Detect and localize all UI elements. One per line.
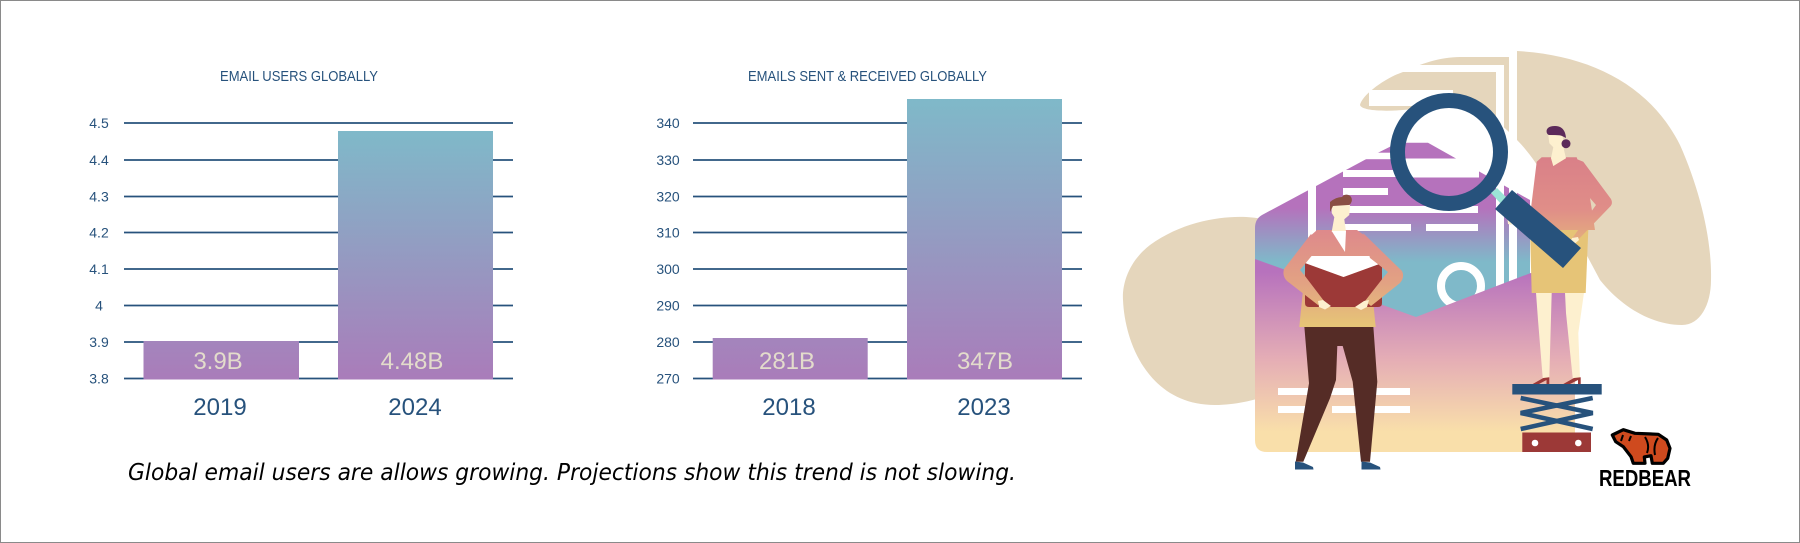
Redbear logo: [1599, 430, 1691, 491]
man shoes: [1295, 462, 1380, 470]
lift platform: [1512, 384, 1602, 394]
magnifier lens ring: [1398, 100, 1500, 204]
y axis labels: 300: [656, 261, 680, 277]
left bar chart: email users globally: [89, 68, 513, 421]
man figure: [1283, 195, 1403, 469]
man hands: [1318, 300, 1369, 310]
bar value 347B: 347B: [957, 348, 1013, 375]
bar value 4.48B: 4.48B: [381, 348, 443, 375]
man torso: [1299, 230, 1376, 327]
open book: [1305, 256, 1382, 307]
bar value 3.9B: 3.9B: [193, 348, 243, 375]
beige document stack: [1360, 57, 1509, 132]
bar value 281B: 281B: [759, 348, 815, 375]
y axis labels: 4.2: [89, 224, 109, 240]
y axis labels: 270: [656, 370, 680, 386]
lift scissors: [1521, 398, 1593, 429]
envelope letter lines: [1308, 65, 1517, 290]
man neck and face: [1332, 205, 1350, 232]
y axis labels: 4: [95, 298, 103, 314]
woman neck and face: [1548, 135, 1566, 166]
man right arm: [1363, 233, 1403, 306]
y axis labels: [89, 115, 109, 386]
y axis labels: 3.9: [89, 334, 109, 350]
envelope circle mark: [1441, 266, 1481, 306]
bar 2018: [713, 338, 868, 380]
bar 2023: [907, 99, 1062, 380]
pocket text lines: [1278, 388, 1410, 413]
x label 2019: 2019: [193, 394, 247, 421]
man collar: [1332, 231, 1346, 252]
y axis labels: 4.3: [89, 188, 109, 204]
scissor lift: [1512, 384, 1602, 452]
bear icon: [1612, 430, 1670, 463]
y axis labels: [656, 115, 680, 386]
woman hands: [1508, 218, 1579, 247]
lift base: [1522, 432, 1591, 452]
envelope back: [1255, 143, 1530, 320]
woman skirt: [1530, 230, 1588, 293]
y axis labels: 290: [656, 298, 680, 314]
bar 2024: [338, 131, 493, 380]
y axis labels: 4.4: [89, 152, 109, 168]
bar 2019: [144, 341, 299, 380]
y axis labels: 4.1: [89, 261, 109, 277]
illustration: envelope, magnifier and people: [1123, 51, 1711, 470]
chart title: EMAILS SENT & RECEIVED GLOBALLY: [748, 68, 987, 85]
y axis labels: 280: [656, 334, 680, 350]
magnifier neck: [1491, 188, 1506, 204]
x label 2023: 2023: [957, 394, 1011, 421]
logo wordmark: REDBEAR: [1599, 465, 1691, 491]
woman blouse: [1528, 157, 1595, 230]
y axis labels: 310: [656, 224, 680, 240]
x label 2024: 2024: [388, 394, 442, 421]
document white frame: [1369, 65, 1504, 197]
left beige blob: [1123, 217, 1266, 405]
y axis labels: 3.8: [89, 370, 109, 386]
y axis labels: 330: [656, 152, 680, 168]
y axis labels: 340: [656, 115, 680, 131]
woman shoes: [1533, 377, 1581, 384]
magnifier handle: [1495, 190, 1581, 268]
woman hair: [1547, 126, 1570, 148]
y axis labels: 4.5: [89, 115, 109, 131]
woman arm: [1570, 158, 1612, 243]
right beige blob: [1517, 51, 1711, 325]
right bar chart: emails sent and received globally: [656, 68, 1082, 421]
envelope front pocket: [1255, 256, 1575, 452]
man trousers: [1296, 326, 1377, 462]
woman figure: [1495, 126, 1612, 384]
man hair: [1330, 195, 1352, 212]
y axis labels: 320: [656, 188, 680, 204]
woman legs: [1536, 293, 1584, 378]
caption: Global email users are allows growing. Projections show this trend is not slowing.: [128, 460, 1016, 486]
chart title: EMAIL USERS GLOBALLY: [220, 68, 378, 85]
x label 2018: 2018: [762, 394, 816, 421]
lift wheels: [1532, 440, 1582, 446]
man left arm: [1283, 234, 1324, 305]
